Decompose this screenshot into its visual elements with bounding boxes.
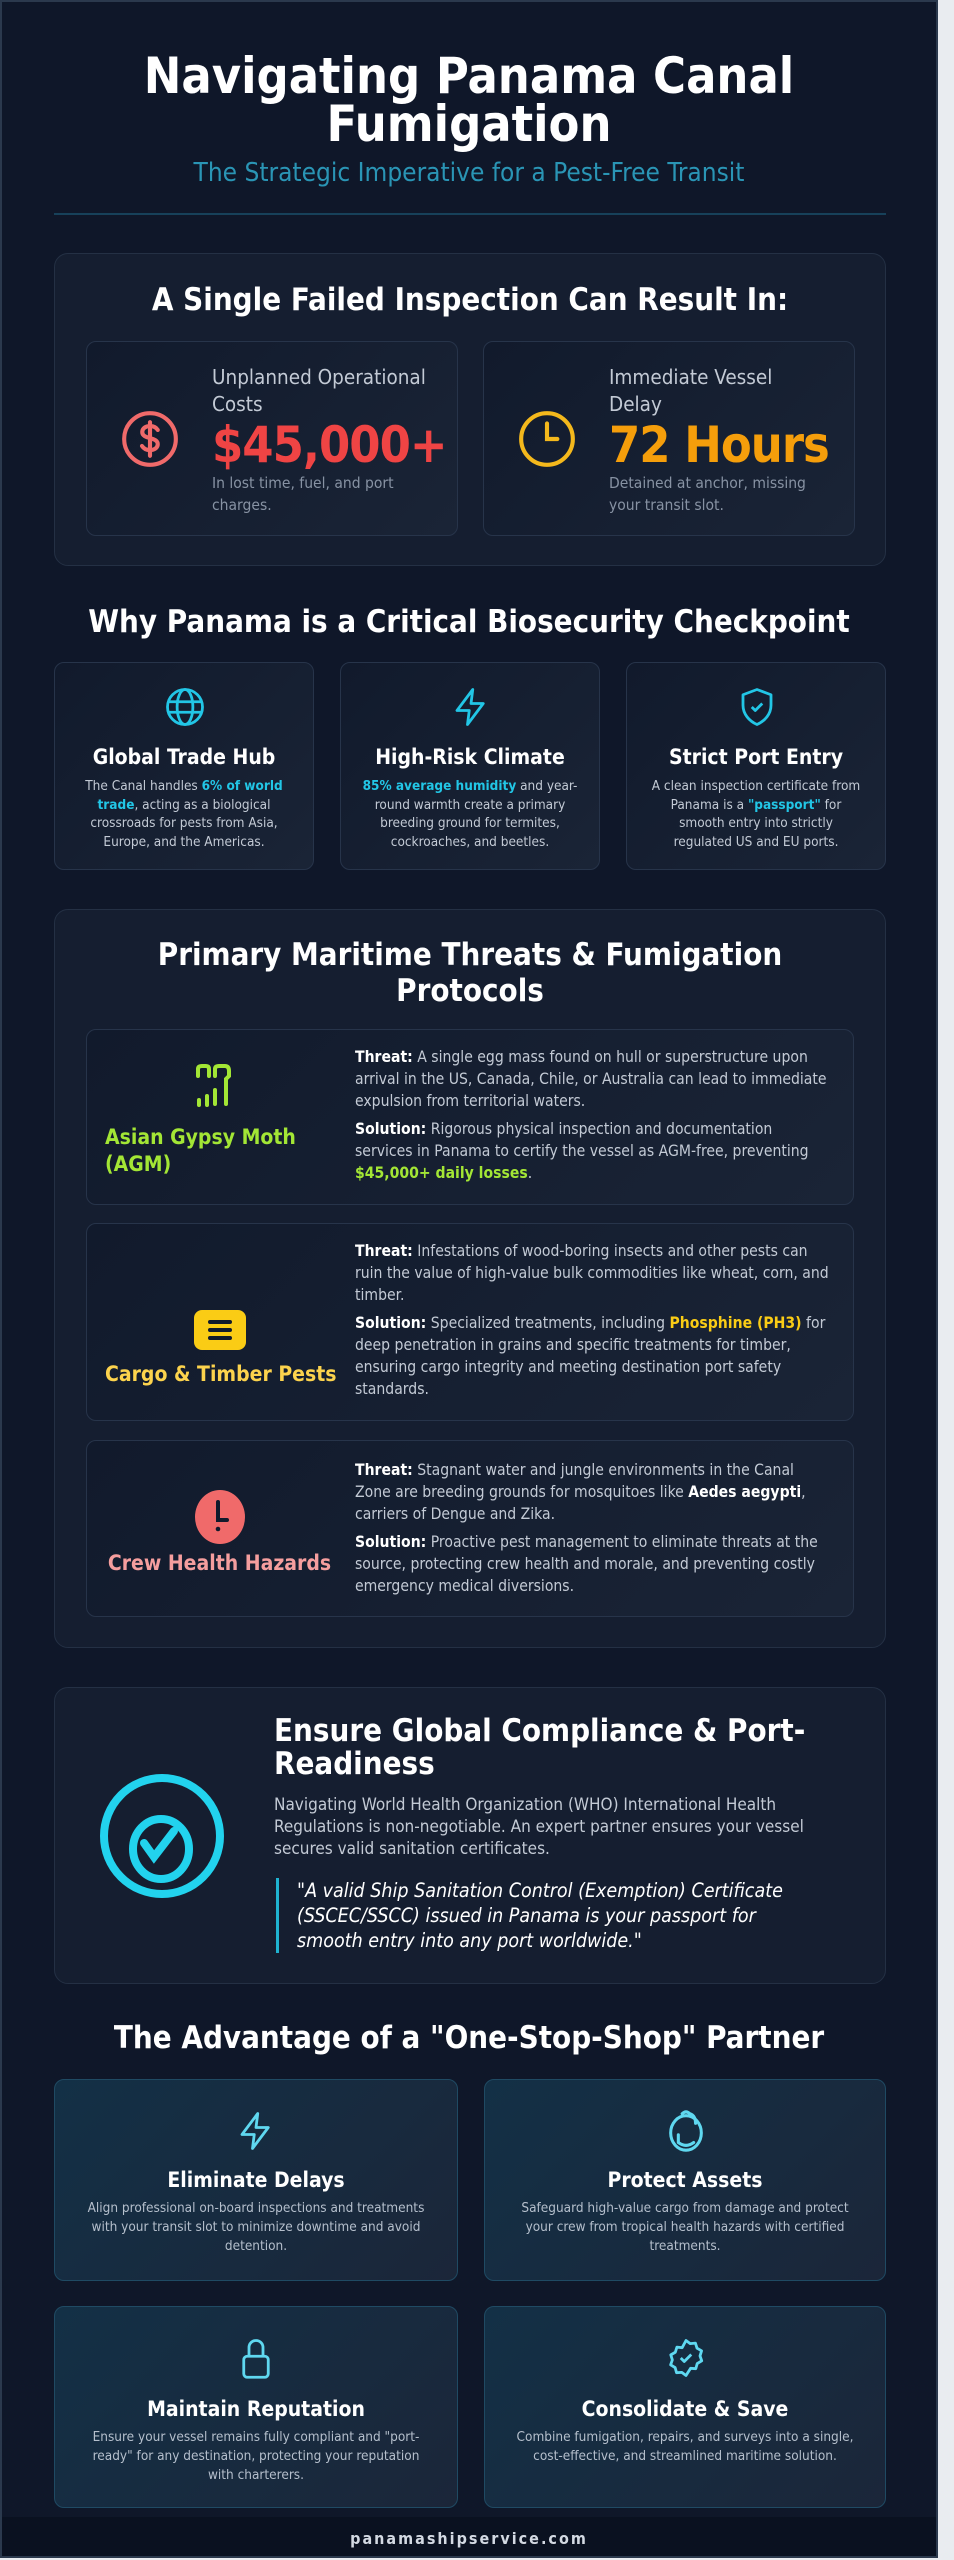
icon: bolt (456, 688, 485, 726)
subtitle: The Strategic Imperative for a Pest-Free Transit (194, 158, 744, 188)
card: maintain reputation: Maintain Reputation (147, 2397, 365, 2421)
threat card: crew health (86, 1440, 854, 1617)
text: delay: 72 Hours (609, 416, 829, 474)
text: delay: Immediate Vessel (609, 365, 772, 389)
card: high-risk climate: 85% average humidity and year-round warmth create a primary breeding ground for termites, cockroaches, and beetles. (363, 778, 577, 850)
icon: globe (166, 688, 204, 726)
text: costs: In lost time, fuel, and port (212, 474, 394, 492)
heading: advantage: The Advantage of a "One-Stop-Shop" Partner (114, 2020, 824, 2056)
text: costs: charges. (212, 496, 272, 514)
quote: "A valid Ship Sanitation Control (Exemption) Certificate (SSCEC/SSCC) issued in Panama is your passport for smooth entry into any port worldwide." (297, 1879, 783, 1952)
card: strict port entry: smooth entry into strictly (679, 815, 833, 831)
card: global trade hub (54, 662, 314, 870)
text: crew: Solution: Proactive pest management to eliminate threats at the source, protecting crew health and morale, and preventing costly emergency medical diversions. (355, 1533, 818, 1595)
card: global trade hub: The Canal handles 6% of world trade, acting as a biological crossroads for pests from Asia, Europe, and the Americas. (85, 778, 283, 850)
text: cargo: Threat: Infestations of wood-boring insects and other pests can (355, 1242, 808, 1260)
text: cargo (355, 1242, 829, 1398)
threat card: gypsy moth (86, 1029, 854, 1205)
card: eliminate delays (54, 2079, 458, 2281)
card: costs (86, 341, 458, 536)
card: maintain reputation (54, 2306, 458, 2508)
card: global trade hub: Global Trade Hub (93, 745, 275, 769)
text: compliance: Navigating World Health Organization (WHO) International Health Regulations is non-negotiable. An expert partner ensures your vessel secures valid sanitation certificates. (274, 1795, 804, 1859)
text: delay (609, 365, 829, 514)
text: cargo: ruin the value of high-value bulk commodities like wheat, corn, and timber. (355, 1264, 829, 1304)
title (144, 47, 794, 153)
card: delay (483, 341, 855, 536)
footer (2, 2517, 936, 2560)
card: eliminate delays: detention. (225, 2238, 287, 2254)
card: eliminate delays: Eliminate Delays (167, 2168, 345, 2192)
threat card: cargo pests: Cargo & Timber Pests (105, 1362, 337, 1386)
icon: bag (669, 2110, 703, 2152)
text: AGM: Threat: A single egg mass found on hull or superstructure upon arrival in the US, Canada, Chile, or Australia can lead to immediate expulsion from territorial waters. (355, 1048, 827, 1110)
text: delay: Delay (609, 392, 662, 416)
threat card: gypsy moth: (AGM) (105, 1152, 171, 1176)
title: Navigating Panama Canal (144, 47, 794, 105)
text: crew (355, 1461, 818, 1595)
card: maintain reputation: with charterers. (208, 2467, 304, 2483)
card: protect assets: treatments. (649, 2238, 721, 2254)
card: consolidate: Consolidate & Save (582, 2397, 788, 2421)
threat card: gypsy moth: Asian Gypsy Moth (105, 1125, 296, 1149)
text: crew: Zone are breeding grounds for mosquitoes like Aedes aegypti, carriers of Dengue and Zika. (355, 1483, 806, 1523)
card: strict port entry: Strict Port Entry (669, 745, 843, 769)
card: protect assets: Protect Assets (607, 2168, 763, 2192)
text: delay: your transit slot. (609, 496, 724, 514)
panel: failed inspection (54, 253, 886, 566)
threat card: cargo pests (86, 1223, 854, 1421)
text: costs: $45,000+ (212, 416, 447, 474)
text: AGM (355, 1048, 827, 1182)
text: costs: Costs (212, 392, 263, 416)
footer: panamashipservice.com (350, 2529, 588, 2548)
heading: why panama: Why Panama is a Critical Biosecurity Checkpoint (88, 604, 850, 640)
card: protect assets: your crew from tropical health hazards with certified (526, 2219, 844, 2235)
card: eliminate delays: Align professional on-board inspections and treatments (88, 2200, 424, 2216)
icon: moth (196, 1064, 231, 1107)
card: high-risk climate (340, 662, 600, 870)
heading: compliance: Ensure Global Compliance & Port-Readiness (274, 1713, 805, 1782)
icon: health (195, 1490, 245, 1544)
text: cargo: Solution: Specialized treatments, including Phosphine (PH3) for deep penetration in grains and specific treatments for timber, ensuring cargo integrity and meeting destination port safety standards. (355, 1314, 825, 1398)
icon: dollar (122, 411, 178, 467)
heading: threats: Primary Maritime Threats & Fumigation Protocols (158, 937, 782, 1009)
panel: maritime threats (54, 909, 886, 1648)
card: high-risk climate: High-Risk Climate (375, 745, 565, 769)
card: strict port entry: regulated US and EU ports. (674, 834, 838, 850)
icon: shield (742, 688, 772, 726)
card: maintain reputation: Ensure your vessel remains fully compliant and "port- (93, 2429, 419, 2445)
card: maintain reputation: ready" for any destination, protecting your reputation (93, 2448, 419, 2464)
card: consolidate: Combine fumigation, repairs, and surveys into a single, (517, 2429, 853, 2445)
text: crew: Threat: Stagnant water and jungle environments in the Canal (355, 1461, 794, 1479)
card: eliminate delays: with your transit slot to minimize downtime and avoid (92, 2219, 420, 2235)
icon: lock (242, 2339, 270, 2379)
card: strict port entry: Panama is a "passport" for (671, 796, 841, 812)
text: delay: Detained at anchor, missing (609, 474, 806, 492)
card: protect assets: Safeguard high-value cargo from damage and protect (521, 2200, 849, 2216)
card: strict port entry (626, 662, 886, 870)
title: Fumigation (327, 95, 611, 153)
card: consolidate (484, 2306, 886, 2508)
text: costs (212, 365, 447, 514)
icon: compliance badge (100, 1774, 224, 1898)
icon: bolt (240, 2112, 270, 2150)
text: AGM: Solution: Rigorous physical inspection and documentation services in Panama to certify the vessel as AGM-free, preventing $45,000+ daily losses. (355, 1120, 809, 1182)
icon: clock (519, 411, 575, 467)
threat card: crew health: Crew Health Hazards (108, 1551, 331, 1575)
card: strict port entry: A clean inspection certificate from (652, 778, 860, 794)
heading: failed inspection: A Single Failed Inspection Can Result In: (152, 282, 788, 318)
card: protect assets (484, 2079, 886, 2281)
text: costs: Unplanned Operational (212, 365, 426, 389)
icon: cargo (194, 1310, 246, 1350)
icon: badge check (669, 2339, 704, 2377)
panel: compliance (54, 1687, 886, 1984)
card: consolidate: cost-effective, and streamlined maritime solution. (533, 2448, 837, 2464)
